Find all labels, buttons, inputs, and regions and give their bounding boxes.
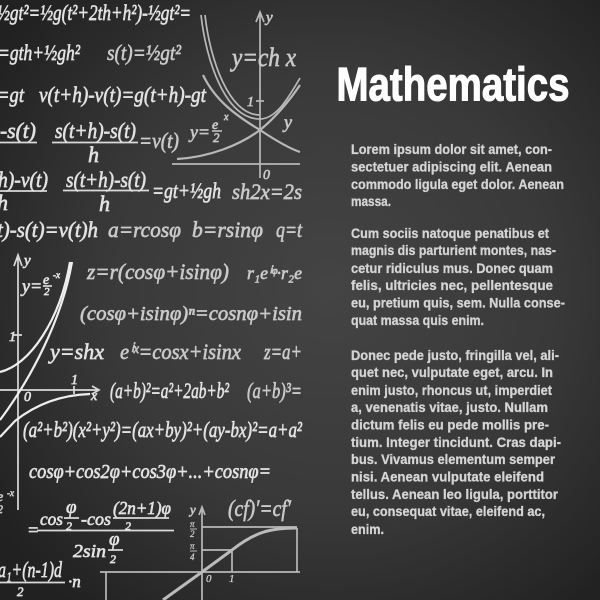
formula: cosine sum fraction: cos	[40, 509, 63, 529]
text block: paragraph 3: a, venenatis vitae, justo. Nullam	[351, 399, 548, 415]
formula row: y = sh x, Euler: z=a+	[263, 339, 302, 364]
text block: paragraph 3: bus. Vivamus elementum semper	[351, 451, 556, 467]
formula: complex number product: z=r(cosφ+isinφ)	[86, 259, 229, 284]
chart: hyperbolic cosine graph	[172, 10, 300, 183]
chart: arcsine style graph: 1	[229, 573, 234, 585]
formula: cosine sum fraction: 2	[125, 519, 131, 533]
formula row 3: v(t+h)-v(t)=g(t+h)-gt	[39, 82, 207, 107]
text block: paragraph 2: magnis dis parturient montes, nas-	[351, 242, 556, 258]
text block: paragraph 3	[351, 347, 561, 537]
formula row 4: derivative quotient: =v(t)	[139, 128, 179, 153]
text block: paragraph 3: quet nec, vulputate eget, arcu. In	[351, 364, 553, 380]
formula: arithmetic series sum: 2	[17, 584, 24, 599]
chart: arcsine style graph	[100, 502, 300, 600]
formula: cosine sum fraction: φ	[66, 497, 77, 518]
text block: paragraph 3: tium. Integer tincidunt. Cras dapi-	[351, 434, 561, 450]
formula row: binomial squares: (a+b)³=	[247, 378, 302, 403]
formula row 1: ½gt²=½g(t²+2th+h²)-½gt²=	[0, 0, 191, 25]
text block: paragraph 3: dictum felis eu pede mollis pre-	[351, 416, 549, 432]
formula row 4: derivative quotient: h	[88, 142, 99, 167]
chart: hyperbolic sine graph: -x	[53, 270, 60, 280]
text block: paragraph 2: felis, ultricies nec, pellentesque	[351, 277, 553, 293]
text block: paragraph 3: Donec pede justo, fringilla vel, ali-	[351, 347, 559, 363]
formula row 6	[0, 217, 303, 242]
chart: hyperbolic sine graph: 0	[24, 390, 31, 405]
chart: hyperbolic cosine graph: x	[223, 112, 229, 123]
chart: hyperbolic cosine graph: y	[264, 10, 273, 26]
chart: hyperbolic cosine graph: e	[212, 118, 218, 133]
formula: cosine sum fraction: =	[27, 520, 39, 540]
formula row: binomial squares: (a+b)²=a²+2ab+b²	[110, 378, 229, 403]
formula: cosine sum fraction: 2	[110, 552, 116, 566]
chart: arcsine style graph: 2	[190, 529, 195, 539]
formula: e fragment at left	[0, 488, 14, 516]
chart: arcsine style graph: 0	[206, 573, 212, 585]
chart: hyperbolic sine graph: x	[90, 389, 98, 404]
chart: hyperbolic sine graph: y	[22, 253, 31, 269]
formula row 6: t)-s(t)=v(t)h	[0, 217, 98, 242]
chart: arcsine style graph: π	[190, 541, 195, 551]
formula: arithmetic series sum: a₁+(n-1)d	[0, 557, 63, 582]
formula: sum of squares identity: (a²+b²)(x²+y²)=(ax+by)²+(ay-bx)²=a+a²	[23, 417, 302, 442]
chart: arcsine style graph: 4	[190, 552, 195, 562]
text block: paragraph 2: Cum sociis natoque penatibus et	[351, 225, 549, 241]
formula: arithmetic series sum: ·n	[68, 572, 81, 591]
formula row: y = sh x, Euler: eⁱˣ=cosx+isinx	[120, 339, 241, 364]
formula row 6: a=rcosφ	[108, 217, 181, 242]
formula: arithmetic series sum	[0, 557, 81, 599]
text block: paragraph 3: nisi. Aenean vulputate eleifend	[351, 468, 544, 484]
formula: cosine sum fraction: 2	[66, 519, 72, 533]
formula: cosine sum fraction: -cos	[81, 509, 111, 529]
formula row 5: velocity quotient: h	[99, 191, 110, 216]
text block: paragraph 1: massa.	[351, 193, 391, 209]
chart: hyperbolic cosine graph: y	[282, 112, 292, 132]
chart: hyperbolic cosine graph: 1	[247, 95, 254, 110]
formula row 4: derivative quotient: s(t+h)-s(t)	[55, 118, 136, 143]
formula row: y = sh x, Euler	[48, 339, 302, 364]
text block: paragraph 2: cetur ridiculus mus. Donec quam	[351, 260, 553, 276]
formula: cosine sum fraction: 2sin	[73, 541, 106, 561]
formula: cosine sum fraction	[27, 497, 174, 566]
formula row: y = sh x, Euler: y=shx	[48, 339, 104, 364]
formula: constant factor derivative: (cf)′=cf′	[228, 496, 292, 521]
text block: paragraph 3: enim.	[351, 521, 384, 537]
formula: e fragment at left: -x	[7, 488, 14, 498]
formula row 5: velocity quotient: =gt+½gh	[152, 178, 221, 203]
formula: cosine sum fraction: (2n+1)φ	[113, 498, 171, 519]
chart: hyperbolic cosine graph: y=ch x	[229, 43, 296, 72]
formula: complex number product	[86, 259, 302, 284]
chart: hyperbolic cosine graph: y=	[188, 122, 210, 142]
text block: paragraph 1: Lorem ipsum dolor sit amet, con-	[351, 141, 552, 157]
panel: chalk formulas	[0, 0, 303, 600]
formula: de Moivre: (cosφ+isinφ)ⁿ=cosnφ+isin	[80, 303, 302, 325]
formula row 4: derivative quotient	[0, 118, 179, 167]
chart: hyperbolic sine graph: e	[43, 273, 49, 288]
formula: complex number product: r₁eⁱᵠ·r₂e	[247, 263, 302, 283]
text block: paragraph 1: commodo ligula eget dolor. Aenean	[351, 176, 564, 192]
text block: paragraph 3: eu, consequat vitae, eleifend ac,	[351, 503, 545, 519]
text block: paragraph 2	[351, 225, 565, 328]
formula: cosine sum fraction: φ	[109, 529, 120, 550]
text block: paragraph 1: sectetuer adipiscing elit. Aenean	[351, 158, 552, 174]
formula row 5: velocity quotient: s(t+h)-s(t)	[66, 167, 146, 192]
formula row 4: derivative quotient: -s(t)	[0, 118, 36, 143]
formula row 6: q=t	[276, 217, 303, 242]
chart: hyperbolic cosine graph: 0	[263, 168, 270, 183]
text block: paragraph 2: eu, pretium quis, sem. Nulla conse-	[351, 294, 565, 310]
chart: hyperbolic sine graph: y=	[20, 276, 42, 296]
chart: hyperbolic sine graph: 1	[71, 373, 78, 388]
chart: hyperbolic sine graph: 1	[9, 330, 16, 345]
text block: paragraph 3: enim justo, rhoncus ut, imperdiet	[351, 382, 552, 398]
formula row 2: =gth+½gh²	[0, 40, 80, 65]
chart: arcsine style graph: π	[190, 519, 195, 529]
formula: cosine sum: cosφ+cos2φ+cos3φ+...+cosnφ=	[29, 461, 271, 483]
text block: paragraph 2: quat massa quis enim.	[351, 312, 484, 328]
text block: paragraph 3: tellus. Aenean leo ligula, porttitor	[351, 486, 559, 502]
formula row 6: b=rsinφ	[192, 217, 263, 242]
chart: arcsine style graph: y	[188, 502, 196, 517]
chart: hyperbolic cosine graph: 2	[213, 130, 220, 145]
formula row 5: velocity quotient: sh2x=2s	[232, 179, 302, 204]
formula row 5: velocity quotient	[0, 167, 302, 216]
chart: hyperbolic sine graph	[0, 253, 99, 510]
chart: hyperbolic sine graph: 2	[44, 286, 50, 298]
formula row 2: s(t)=½gt²	[107, 40, 181, 65]
formula row 2	[0, 40, 181, 65]
text block: paragraph 1	[351, 141, 564, 209]
